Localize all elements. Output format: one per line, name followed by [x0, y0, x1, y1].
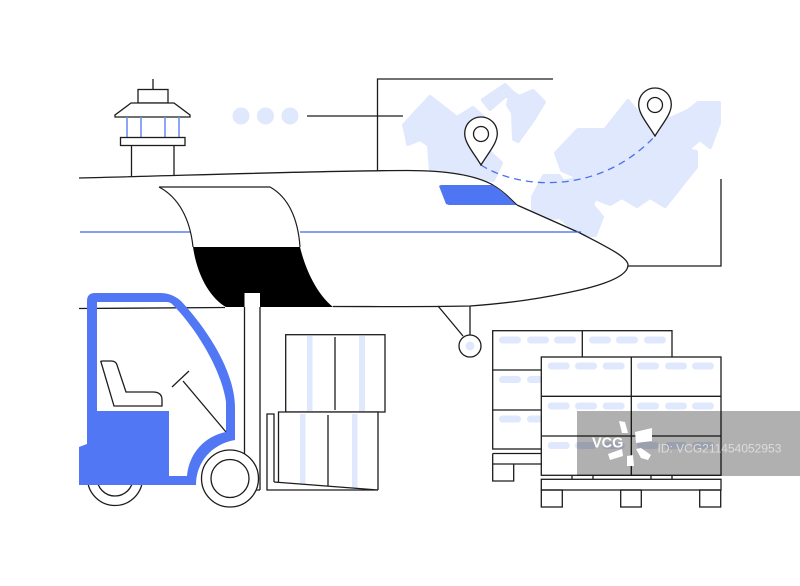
map: world background — [404, 85, 719, 235]
forklift forks — [267, 414, 378, 490]
bracket lines — [307, 79, 721, 266]
seat — [101, 361, 162, 406]
cargo box lower — [274, 412, 378, 490]
steering wheel — [172, 371, 226, 432]
airplane fuselage — [79, 170, 628, 308]
watermark logo text: VCG — [592, 436, 623, 452]
forklift cabin — [79, 293, 235, 485]
forklift rear wheel — [88, 450, 142, 506]
pallet stack front — [541, 357, 721, 507]
watermark id text: ID: VCG211454052953 — [658, 442, 782, 456]
front pallet labels — [548, 362, 714, 449]
control tower — [115, 79, 190, 176]
location pin left — [465, 117, 497, 165]
route dashed line — [481, 136, 655, 183]
cockpit window — [439, 185, 518, 205]
forklift mast — [244, 293, 260, 490]
watermark band — [577, 411, 800, 476]
forklift front wheel — [202, 450, 258, 507]
cockpit outline — [493, 185, 517, 205]
mast edges — [244, 307, 260, 490]
three dots — [232, 108, 298, 124]
fuselage stripe — [80, 231, 581, 233]
location pin right — [639, 88, 671, 136]
watermark logo icon — [608, 421, 652, 466]
pallet stack back — [493, 331, 672, 481]
cargo door — [159, 187, 333, 307]
cargo box upper — [286, 335, 385, 412]
landing gear — [438, 306, 481, 357]
back pallet labels — [499, 336, 666, 422]
airplane outline — [79, 170, 628, 308]
